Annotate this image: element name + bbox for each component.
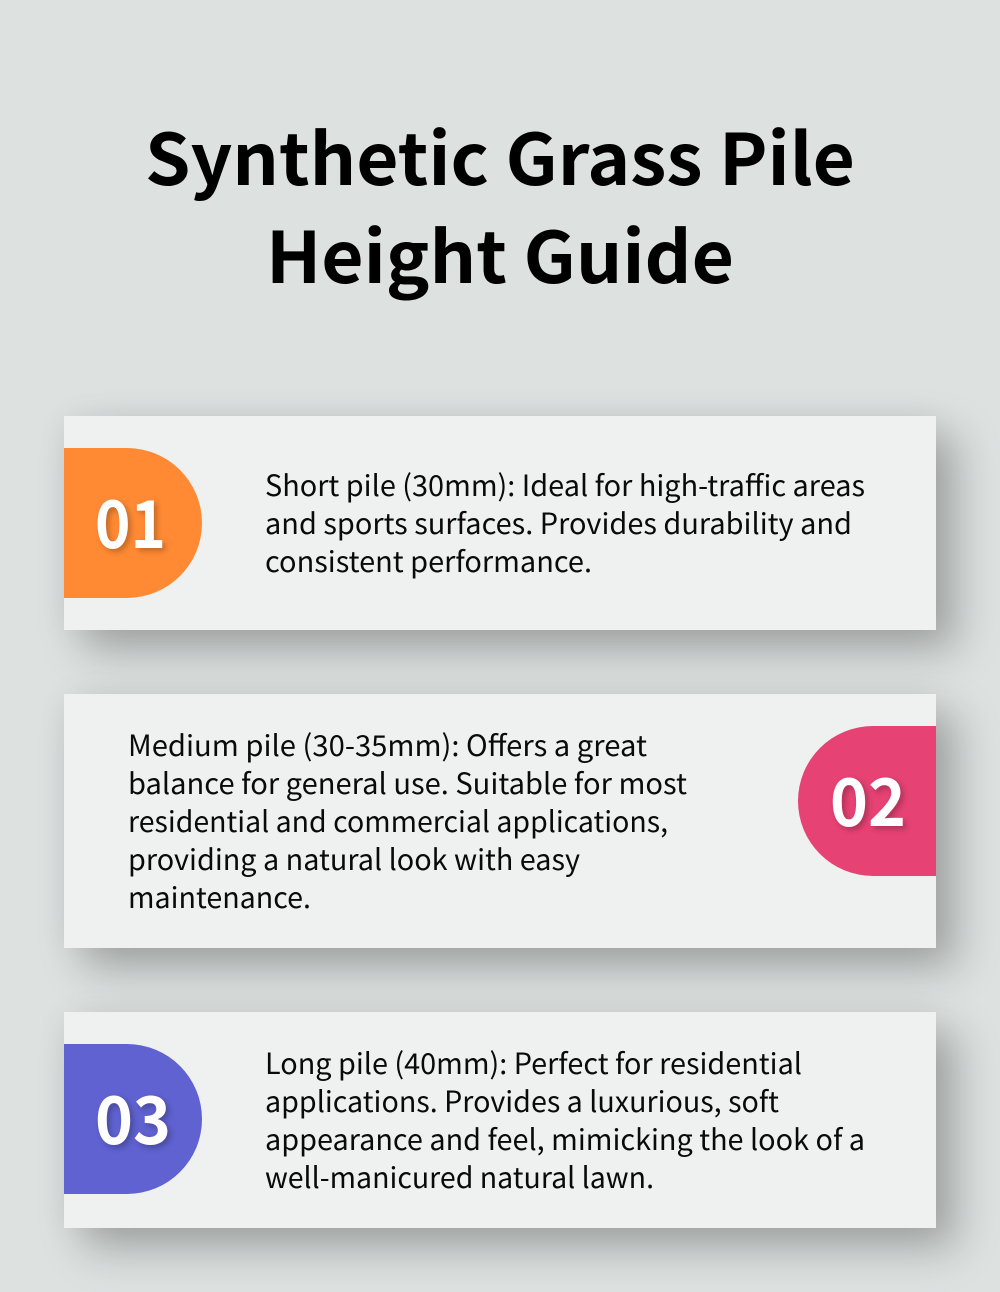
text: long pile description: Long pile (40mm): Perfect for residential: [265, 1041, 802, 1083]
title: Synthetic Grass Pile: [145, 104, 855, 206]
text: long pile description: appearance and feel, mimicking the look of a: [265, 1117, 865, 1159]
text: long pile description: applications. Provides a luxurious, soft: [265, 1079, 779, 1121]
title: [145, 104, 855, 304]
text: short pile description: [265, 463, 865, 581]
title: Height Guide: [266, 202, 734, 304]
text: long pile description: [265, 1041, 865, 1197]
text: medium pile description: providing a natural look with easy: [128, 837, 580, 879]
badge: 03: [64, 1044, 202, 1194]
text: medium pile description: [128, 723, 687, 917]
text: medium pile description: residential and commercial applications,: [128, 799, 668, 841]
text: medium pile description: balance for general use. Suitable for most: [128, 761, 687, 803]
panel: long pile: [64, 1012, 936, 1228]
badge: 02: 02: [830, 750, 906, 846]
panel: short pile: [64, 416, 936, 630]
badge: 01: [64, 448, 202, 598]
badge: 02: [798, 726, 936, 876]
text: short pile description: and sports surfaces. Provides durability and: [265, 501, 852, 543]
text: short pile description: consistent performance.: [265, 539, 592, 581]
text: long pile description: well-manicured natural lawn.: [265, 1155, 654, 1197]
badge: 01: 01: [95, 472, 166, 568]
text: short pile description: Short pile (30mm): Ideal for high-traffic areas: [265, 463, 865, 505]
badge: 03: 03: [95, 1068, 171, 1164]
text: medium pile description: maintenance.: [128, 875, 311, 917]
text: medium pile description: Medium pile (30-35mm): Offers a great: [128, 723, 647, 765]
panel: medium pile: [64, 694, 936, 948]
